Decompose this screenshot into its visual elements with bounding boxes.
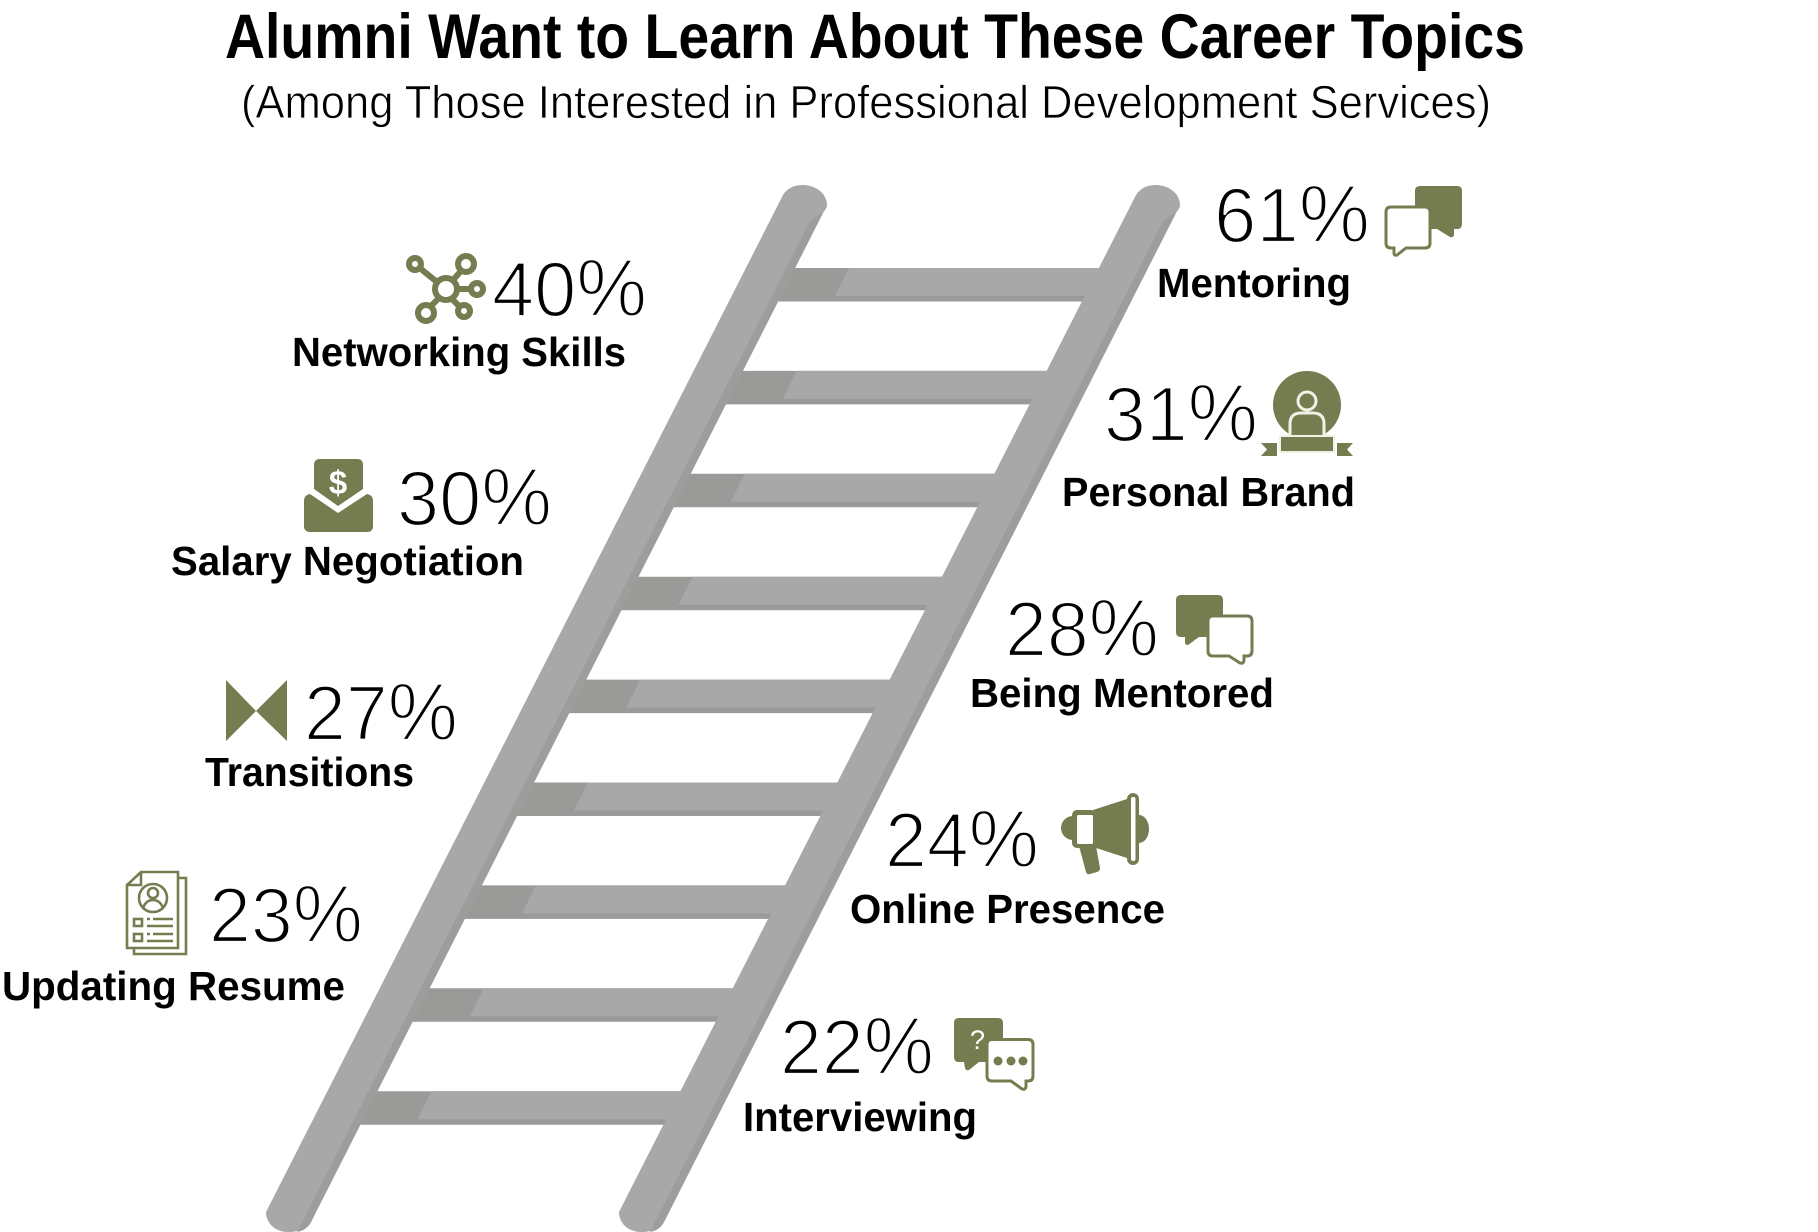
value: 28% xyxy=(1005,583,1159,674)
icon: bow tie shape xyxy=(226,680,287,741)
icon: personal brand badge xyxy=(1261,371,1353,456)
item: interviewing xyxy=(743,1001,1033,1140)
item: salary negotiation xyxy=(171,452,552,584)
value: 31% xyxy=(1104,368,1258,459)
value: 27% xyxy=(304,667,458,758)
label: Online Presence xyxy=(850,886,1165,932)
icon: salary envelope: $ xyxy=(329,464,347,501)
label: Transitions xyxy=(205,749,414,795)
icon: salary envelope xyxy=(304,459,373,532)
icon: network nodes xyxy=(409,256,483,321)
label: Salary Negotiation xyxy=(171,538,524,584)
value: 24% xyxy=(885,794,1039,885)
label: Interviewing xyxy=(743,1094,977,1140)
label: Being Mentored xyxy=(970,670,1274,716)
value: 61% xyxy=(1214,169,1370,260)
icon: chat bubbles xyxy=(1386,186,1462,255)
subtitle: (Among Those Interested in Professional Development Services) xyxy=(241,76,1491,128)
item: being mentored xyxy=(970,583,1274,716)
value: 23% xyxy=(209,869,363,960)
icon: question and answer bubbles: ? xyxy=(970,1025,985,1055)
icon: megaphone xyxy=(1061,793,1149,874)
item: online presence xyxy=(850,793,1165,932)
item: personal brand xyxy=(1062,368,1355,515)
icon: question and answer bubbles xyxy=(954,1018,1033,1089)
label: Updating Resume xyxy=(2,963,345,1009)
value: 22% xyxy=(780,1001,934,1092)
value: 40% xyxy=(492,243,647,334)
item: updating resume xyxy=(2,869,363,1009)
value: 30% xyxy=(397,452,552,543)
label: Mentoring xyxy=(1157,260,1351,306)
title: Alumni Want to Learn About These Career Topics xyxy=(225,2,1525,72)
ladder xyxy=(266,185,1180,1232)
label: Personal Brand xyxy=(1062,469,1355,515)
item: mentoring xyxy=(1157,169,1462,306)
icon: resume document xyxy=(127,872,186,954)
item: transitions xyxy=(205,667,458,795)
item: networking skills xyxy=(292,243,647,375)
icon: chat bubbles xyxy=(1176,595,1252,663)
label: Networking Skills xyxy=(292,329,626,375)
